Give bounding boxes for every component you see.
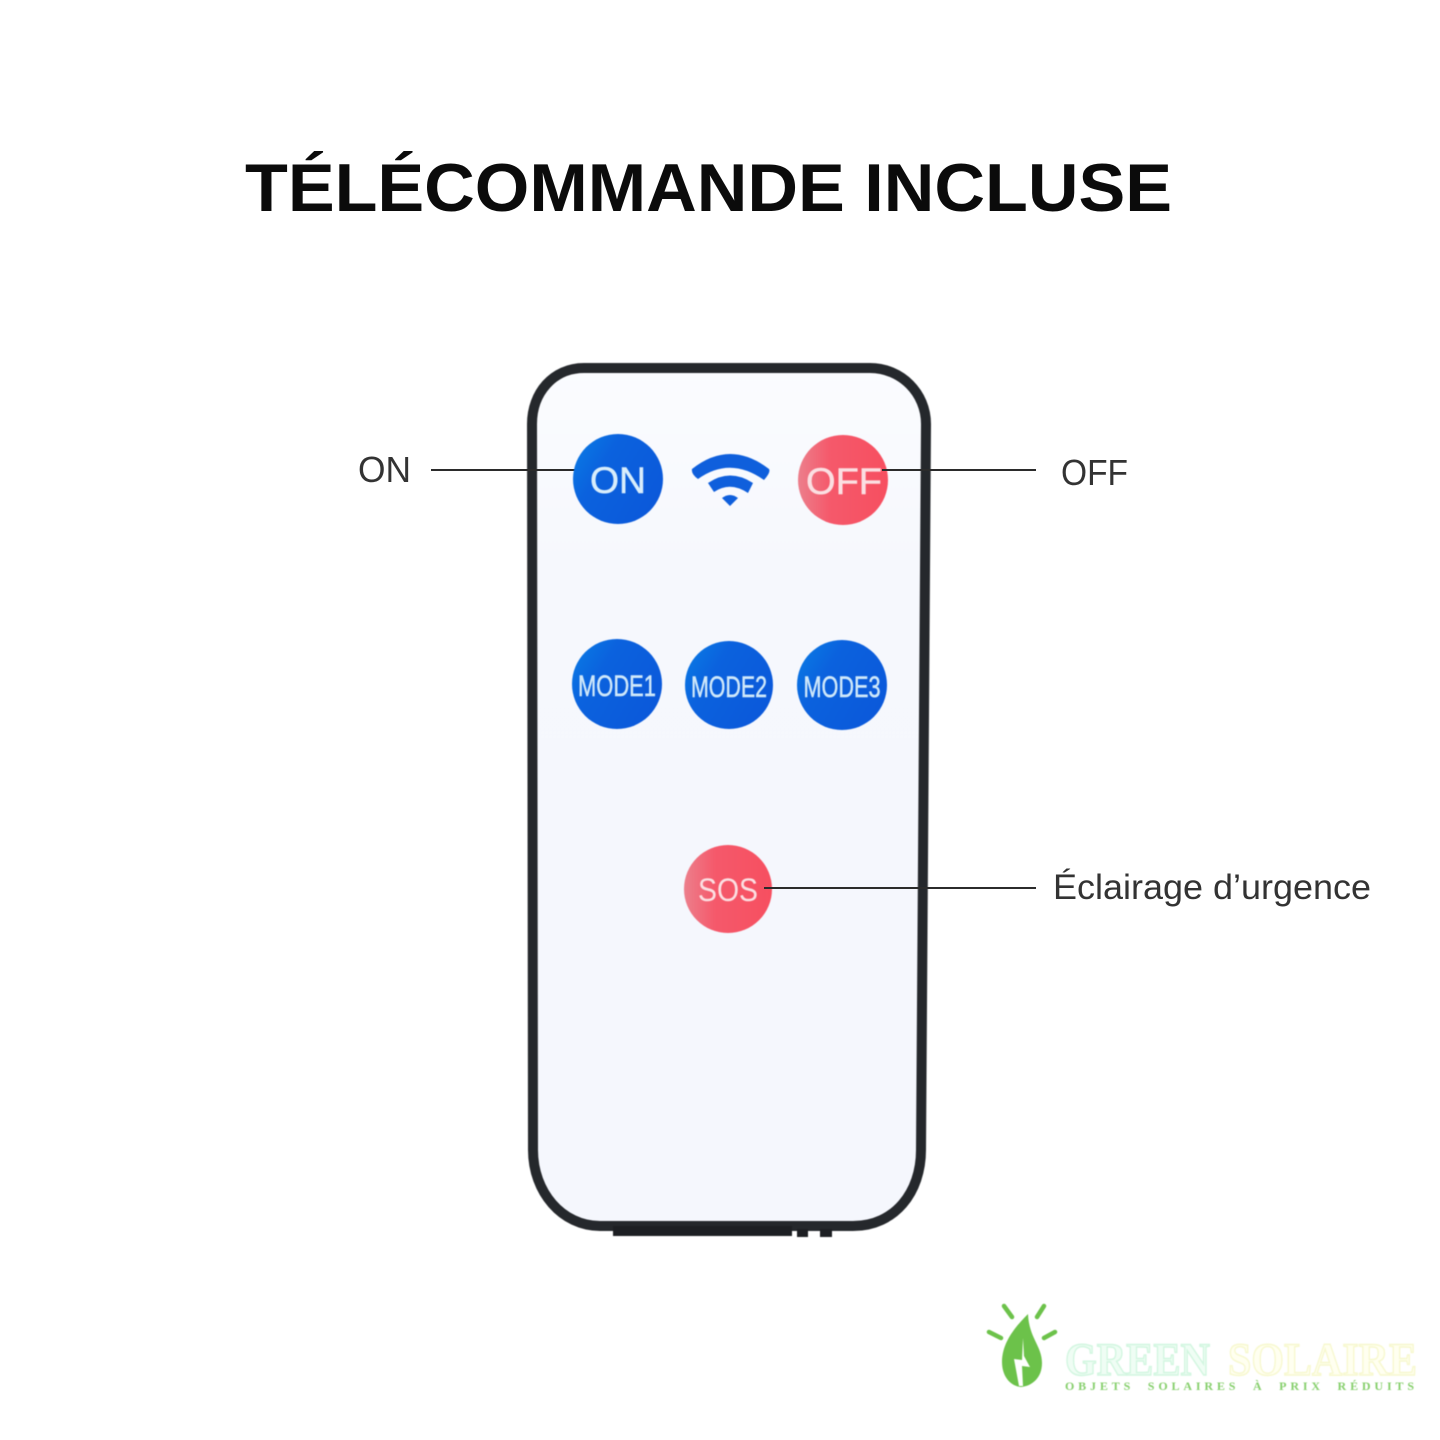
button: OFF: OFF — [806, 461, 882, 502]
logo: Green Solaire — [989, 1306, 1417, 1393]
button: MODE1 — [572, 639, 662, 729]
button: MODE1: MODE1 — [578, 670, 656, 703]
callout: OFF: OFF — [1061, 452, 1128, 493]
callout: emergency lighting: Éclairage d’urgence — [1053, 868, 1371, 907]
remote control body — [532, 368, 926, 1237]
button: MODE3: MODE3 — [804, 671, 880, 704]
icon: leaf with lightning — [989, 1306, 1055, 1387]
button: ON — [573, 434, 663, 524]
logo: Green Solaire: SOLAIRE — [1228, 1334, 1417, 1386]
icon: wireless signal — [692, 454, 769, 506]
button: ON: ON — [590, 460, 646, 501]
bottom edge detail — [613, 1226, 832, 1237]
button: MODE2 — [685, 641, 773, 729]
logo wordmark: GREEN — [1065, 1334, 1210, 1386]
button: SOS — [684, 845, 772, 933]
logo tagline: OBJETS SOLAIRES À PRIX RÉDUITS — [1065, 1379, 1414, 1393]
button: OFF — [798, 435, 888, 525]
callout: ON: ON — [358, 449, 411, 490]
button: MODE2: MODE2 — [691, 671, 767, 704]
button: SOS: SOS — [698, 872, 758, 908]
title: TÉLÉCOMMANDE INCLUSE — [245, 150, 1172, 226]
button: MODE3 — [797, 640, 887, 730]
